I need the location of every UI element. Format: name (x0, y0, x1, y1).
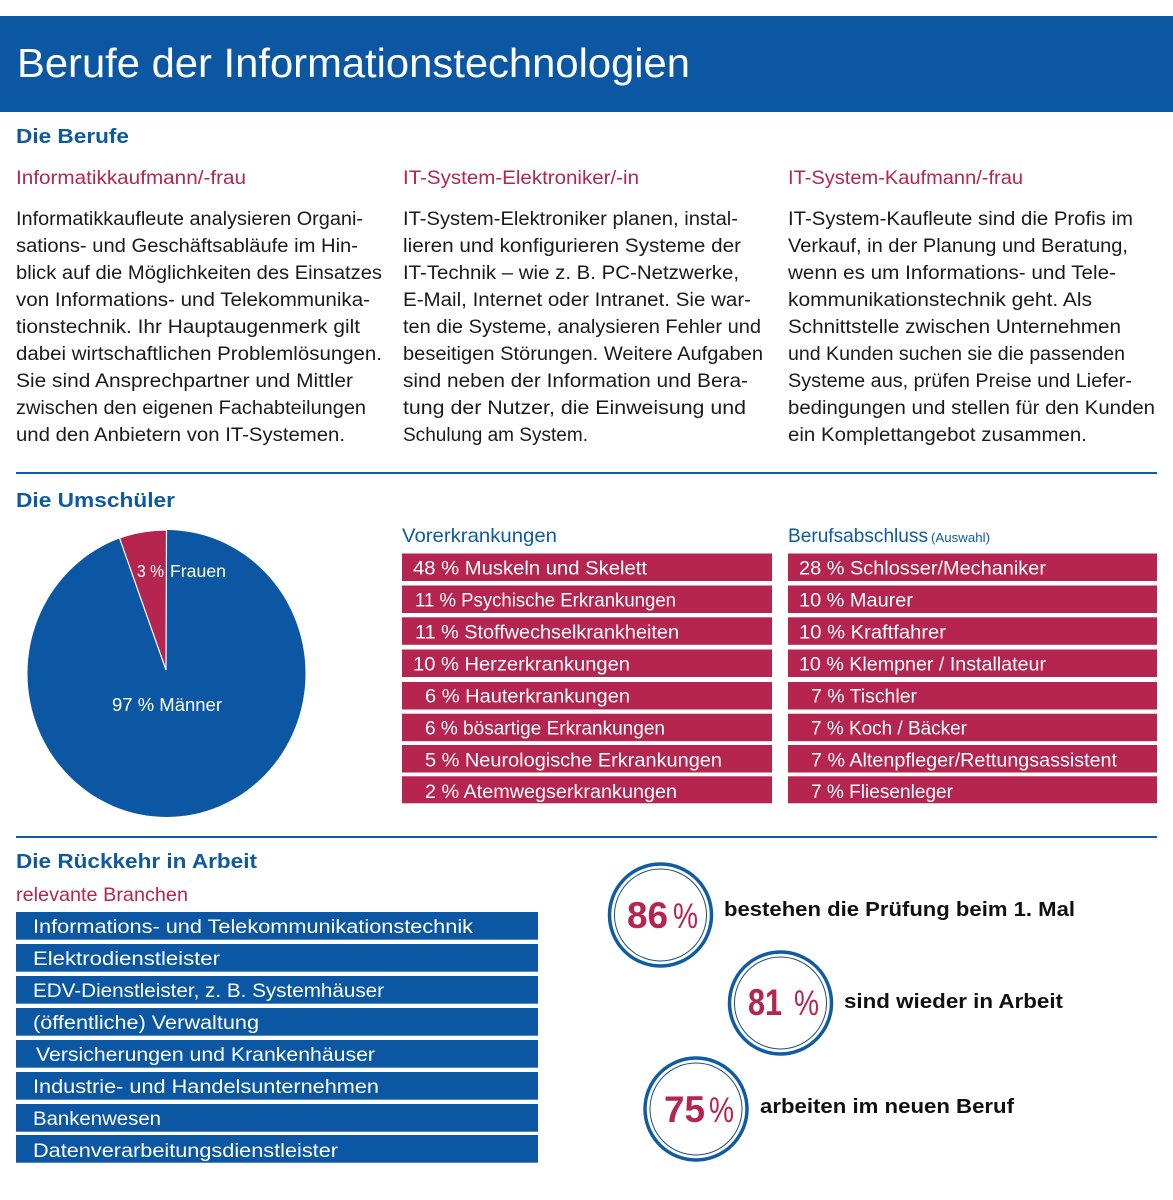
list: Vorerkrankungen: 2 % Atemwegserkrankungen (425, 781, 677, 803)
list: Branchen: Elektrodienstleister (33, 948, 221, 970)
text block: IT-System-Kaufmann: bedingungen und stellen für den Kunden (788, 398, 1155, 419)
list: Berufsabschluss: 10 % Klempner / Installateur (799, 654, 1047, 676)
text block: IT-System-Elektroniker: beseitigen Störungen. Weitere Aufgaben (403, 344, 763, 365)
text block: IT-System-Kaufmann: wenn es um Informations- und Tele- (787, 263, 1116, 284)
text block: Informatikkaufmann: zwischen den eigenen Fachabteilungen (16, 398, 366, 419)
text block: Informatikkaufmann: Informatikkaufmann/-frau (16, 167, 246, 189)
text block: Informatikkaufmann: blick auf die Möglichkeiten des Einsatzes (16, 263, 382, 284)
list: Vorerkrankungen: 6 % Hauterkrankungen (425, 686, 630, 708)
stat: 81 % (730, 952, 1063, 1054)
list: Berufsabschluss: 7 % Fliesenleger (811, 781, 953, 803)
text block: IT-System-Elektroniker: IT-System-Elektroniker planen, instal- (403, 209, 738, 230)
stat: 81 %: % (794, 984, 819, 1023)
stat: 81 %: 81 (748, 982, 782, 1023)
text block: IT-System-Elektroniker: tung der Nutzer, die Einweisung und (403, 398, 746, 419)
list: Berufsabschluss: 7 % Koch / Bäcker (811, 718, 967, 740)
text block: Informatikkaufmann: dabei wirtschaftlichen Problemlösungen. (16, 344, 382, 365)
text block: IT-System-Elektroniker: E-Mail, Internet oder Intranet. Sie war- (403, 290, 751, 311)
text block: IT-System-Elektroniker: ten die Systeme, analysieren Fehler und (403, 317, 761, 338)
list: Branchen (16, 912, 538, 1163)
stat: 86 %: 86 (627, 895, 668, 936)
text block: IT-System-Elektroniker: IT-Technik – wie z. B. PC-Netzwerke, (403, 263, 739, 284)
text block: Informatikkaufmann: tionstechnik. Ihr Hauptaugenmerk gilt (16, 317, 361, 338)
text block: IT-System-Kaufmann: kommunikationstechnik geht. Als (788, 290, 1092, 311)
text block: IT-System-Elektroniker: sind neben der Information und Bera- (403, 371, 748, 392)
text block: IT-System-Elektroniker: lieren und konfigurieren Systeme der (403, 236, 742, 257)
text block: IT-System-Kaufmann: und Kunden suchen sie die passenden (788, 344, 1125, 365)
list: Berufsabschluss: 28 % Schlosser/Mechaniker (799, 558, 1047, 580)
panel: Die Berufe (16, 126, 1155, 446)
list: Branchen: Datenverarbeitungsdienstleister (33, 1140, 339, 1162)
list: Branchen: Bankenwesen (33, 1108, 161, 1130)
pie chart (28, 530, 306, 817)
title banner: Berufe der Informationstechnologien (17, 40, 690, 86)
list: Branchen: Industrie- und Handelsunternehmen (33, 1076, 379, 1098)
list: Berufsabschluss: 7 % Tischler (811, 686, 918, 708)
list: Berufsabschluss: 10 % Kraftfahrer (799, 622, 947, 644)
text block: IT-System-Kaufmann: Systeme aus, prüfen Preise und Liefer- (788, 371, 1132, 392)
list: Vorerkrankungen: 11 % Psychische Erkrankungen (415, 590, 676, 612)
list: Branchen: Versicherungen und Krankenhäuser (36, 1044, 376, 1066)
panel: Die Rückkehr in Arbeit (16, 851, 1075, 1163)
pie chart: Frauen (170, 561, 226, 581)
text block: IT-System-Kaufmann: Schnittstelle zwischen Unternehmen (788, 317, 1121, 338)
stat: 86 % (610, 864, 1075, 966)
text block: Informatikkaufmann: sations- und Geschäftsabläufe im Hin- (16, 236, 358, 257)
panel: Die Umschüler (16, 490, 1157, 817)
list: Vorerkrankungen (402, 525, 772, 803)
stat: 75 % (645, 1058, 1014, 1160)
heading: Die Rückkehr in Arbeit: Die Rückkehr in Arbeit (16, 851, 257, 873)
stat: 86 %: % (673, 897, 698, 936)
list: Branchen: (öffentliche) Verwaltung (33, 1012, 259, 1034)
list: Berufsabschluss: 10 % Maurer (799, 590, 914, 612)
list: Vorerkrankungen: Vorerkrankungen (402, 525, 557, 547)
title banner (0, 16, 1173, 112)
stat: 75 %: 75 (664, 1089, 705, 1130)
list: Vorerkrankungen: 5 % Neurologische Erkrankungen (425, 750, 722, 772)
text block: IT-System-Kaufmann (787, 167, 1155, 446)
text block: Informatikkaufmann: und den Anbietern von IT-Systemen. (16, 425, 345, 446)
list: Branchen: Informations- und Telekommunikationstechnik (33, 916, 473, 938)
text block: Informatikkaufmann: Informatikkaufleute analysieren Organi- (16, 209, 363, 230)
list: Vorerkrankungen: 48 % Muskeln und Skelett (413, 558, 648, 580)
pie chart: 3 % (137, 561, 164, 581)
text block: IT-System-Elektroniker: IT-System-Elektroniker/-in (403, 167, 639, 189)
text block: IT-System-Elektroniker (403, 167, 763, 446)
subheading: relevante Branchen: relevante Branchen (16, 884, 188, 906)
text block: Informatikkaufmann: Sie sind Ansprechpartner und Mittler (16, 371, 354, 392)
text block: IT-System-Kaufmann: ein Komplettangebot zusammen. (788, 425, 1087, 446)
text block: Informatikkaufmann (16, 167, 382, 446)
stat: 75 %: arbeiten im neuen Beruf (760, 1096, 1014, 1118)
pie chart: 97 % Männer (112, 695, 222, 715)
list: Branchen: EDV-Dienstleister, z. B. Systemhäuser (33, 980, 385, 1002)
heading: Die Umschüler: Die Umschüler (16, 490, 175, 512)
list: Vorerkrankungen: 11 % Stoffwechselkrankheiten (415, 622, 679, 644)
list: Vorerkrankungen: 10 % Herzerkrankungen (413, 654, 630, 676)
text block: IT-System-Kaufmann: IT-System-Kaufmann/-frau (788, 167, 1023, 189)
stat: 75 %: % (709, 1091, 734, 1130)
stat: 81 %: sind wieder in Arbeit (844, 991, 1063, 1013)
heading: Die Berufe: Die Berufe (16, 126, 129, 148)
list: Berufsabschluss: Berufsabschluss (788, 525, 928, 547)
list: Vorerkrankungen: 6 % bösartige Erkrankungen (425, 718, 665, 740)
text block: IT-System-Kaufmann: Verkauf, in der Planung und Beratung, (788, 236, 1128, 257)
text block: IT-System-Kaufmann: IT-System-Kaufleute sind die Profis im (788, 209, 1133, 230)
list: Berufsabschluss (788, 525, 1157, 803)
text block: Informatikkaufmann: von Informations- und Telekommunika- (16, 290, 370, 311)
text block: IT-System-Elektroniker: Schulung am System. (403, 425, 588, 446)
list: Berufsabschluss: (Auswahl) (931, 530, 990, 545)
stat: 86 %: bestehen die Prüfung beim 1. Mal (724, 899, 1075, 921)
list: Berufsabschluss: 7 % Altenpfleger/Rettungsassistent (811, 750, 1118, 772)
